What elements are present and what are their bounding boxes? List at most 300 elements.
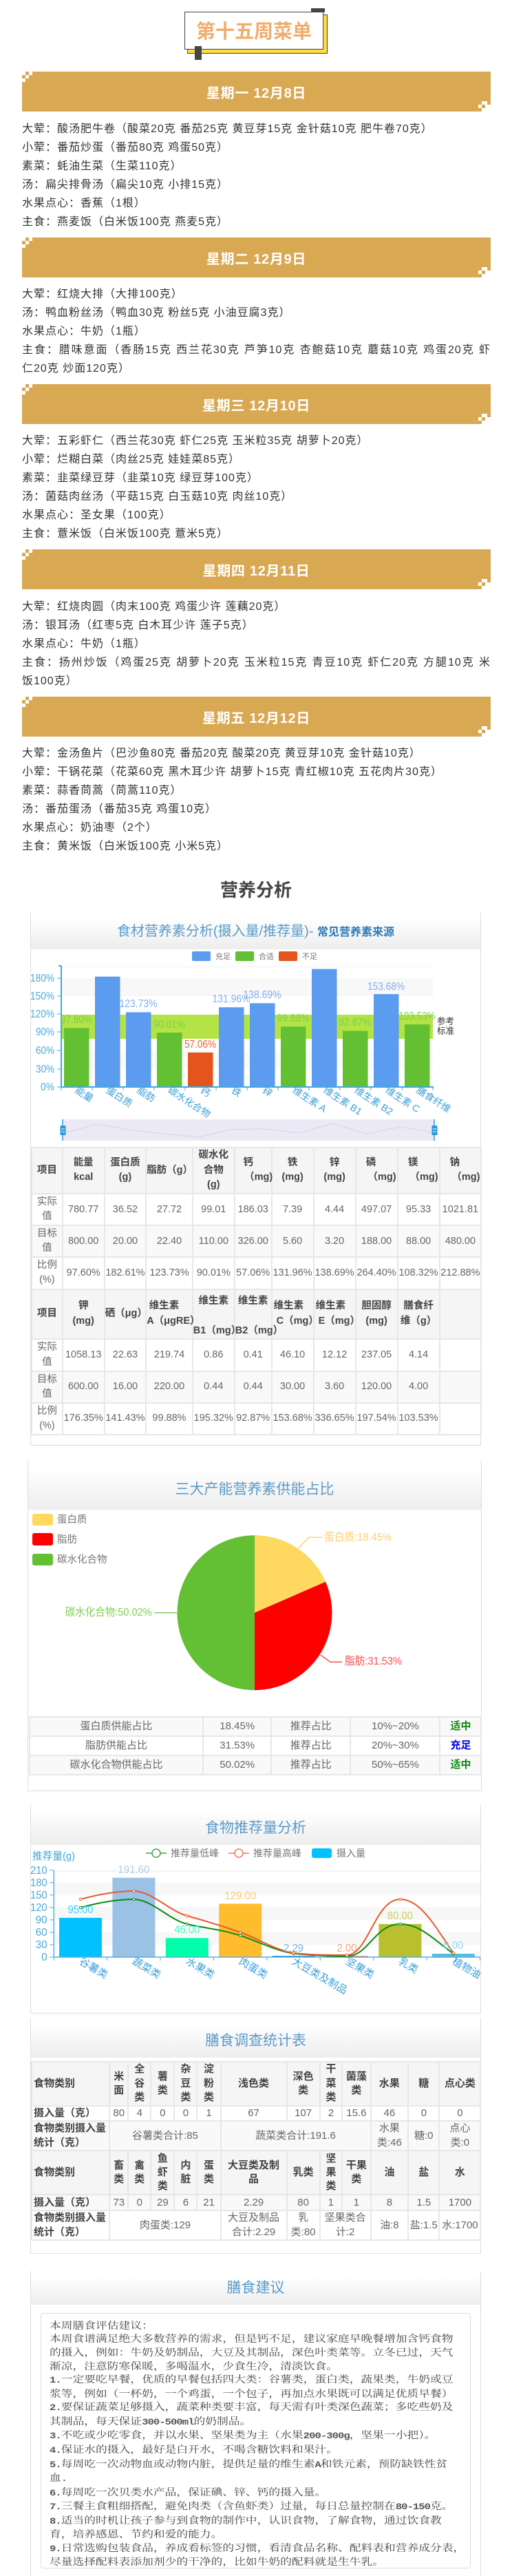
table: nutrient values: (%)	[39, 1274, 55, 1285]
table: nutrient values: 4.44	[325, 1204, 344, 1215]
table: nutrient values: 36.52	[113, 1204, 138, 1215]
advice text: 血.	[50, 2471, 67, 2484]
table: dietary survey: 21	[203, 2197, 215, 2208]
table: nutrient values: 22.63	[113, 1349, 138, 1360]
table: nutrient values: 480.00	[445, 1236, 476, 1247]
recommendation high curve	[79, 1890, 455, 1956]
table: dietary survey: 深色	[293, 2071, 314, 2082]
menu lines: 星期三: 素菜：韭菜绿豆芽（韭菜10克 绿豆芽100克）	[22, 472, 259, 483]
advice text: 6.每周吃一次贝类水产品，保证碘、锌、钙的摄入量。	[50, 2485, 326, 2499]
advice text: 5.每周吃一次动物血或动物内脏，提供足量的维生素A和铁元素，预防缺铁性贫	[50, 2457, 447, 2471]
category labels: 坚果类	[343, 1956, 376, 1981]
category labels	[73, 1084, 453, 1120]
pie legend: 脂肪	[57, 1534, 77, 1545]
menu lines: 星期五: 水果点心：奶油枣（2个）	[22, 822, 158, 833]
y axis labels: 90	[36, 1914, 47, 1926]
table: dietary survey: 糖	[418, 2078, 429, 2089]
pie legend: 碳水化合物	[57, 1554, 107, 1565]
menu lines: 星期三	[22, 434, 369, 540]
panel heading: 食材营养素分析: 食材营养素分析(摄入量/推荐量)- 常见营养素来源	[117, 924, 394, 939]
bar value labels: 97.60%	[61, 1014, 92, 1026]
table: dietary survey: 类:46	[377, 2137, 402, 2149]
menu lines: 星期四: 水果点心：牛奶（1瓶） 饭100克）	[22, 637, 146, 687]
panel heading: 膳食建议	[31, 2271, 480, 2305]
y axis labels: 0	[41, 1952, 47, 1963]
advice box	[41, 2313, 471, 2568]
table: dietary survey: 鱼	[158, 2153, 168, 2164]
table: nutrient values: 120.00	[361, 1381, 392, 1392]
table: dietary survey: 虾	[158, 2166, 168, 2178]
table: nutrient values: 195.32%	[194, 1413, 233, 1424]
bar value labels	[67, 1864, 463, 1954]
advice text: 渐凉，注意防寒保暖，多喝温水，少食生冷，清淡饮食。	[50, 2359, 338, 2373]
panel heading: 三大产能营养素供能占比: 三大产能营养素供能占比	[175, 1481, 334, 1497]
table: nutrient values: 97.60%	[67, 1267, 100, 1278]
menu lines: 星期二: 主食：腊味意面（香肠15克 西兰花30克 芦笋10克 杏鲍菇10克 蘑菇10克 鸡蛋20克 虾	[22, 344, 491, 355]
table: dietary survey: 水果	[379, 2078, 400, 2089]
bar value labels: 80.00	[387, 1910, 413, 1922]
table: nutrient values: （mg)	[244, 1172, 273, 1183]
table: nutrient values: 800.00	[68, 1236, 98, 1247]
table: nutrient values: 3.60	[325, 1381, 344, 1392]
table: dietary survey: 水	[455, 2166, 465, 2178]
table: nutrient values: 锌	[330, 1157, 339, 1168]
y axis labels: 120%	[30, 1009, 54, 1020]
banner: 星期四 12月11日: 星期四 12月11日	[203, 564, 310, 579]
table: nutrient values: 336.65%	[314, 1413, 354, 1424]
table: nutrient values: 4.00	[409, 1381, 428, 1392]
table: dietary survey: 73	[113, 2197, 125, 2208]
table: nutrient values: 12.12	[322, 1349, 347, 1360]
menu lines: 星期五: 小荤：干锅花菜（花菜60克 黑木耳少许 胡萝卜15克 青红椒10克 五花肉片30克）	[22, 766, 442, 778]
table: dietary survey: 面	[114, 2084, 124, 2096]
table: nutrient values: 4.14	[409, 1349, 428, 1360]
day menu: 星期五	[22, 697, 491, 852]
table: nutrient values	[31, 1147, 482, 1435]
table: nutrient values: 维生素	[199, 1296, 228, 1307]
banner: 星期三 12月10日: 星期三 12月10日	[202, 399, 310, 414]
table: nutrient values: 钙	[243, 1157, 253, 1168]
banner: 星期五 12月12日	[22, 697, 491, 737]
table: nutrient values: 铁	[288, 1157, 297, 1168]
pie chart: macronutrient share	[32, 1514, 402, 1691]
panel: macronutrient energy share	[28, 1461, 482, 1791]
table: nutrient values: 合物	[204, 1165, 224, 1176]
table: dietary survey: 类	[351, 2084, 361, 2096]
table: dietary survey: 80	[297, 2197, 309, 2208]
combo chart: food intake and recommendation	[31, 1848, 480, 1996]
bar chart: nutrient intake ratio	[30, 951, 454, 1141]
y axis labels: 90%	[36, 1026, 54, 1038]
intake bars	[59, 1878, 475, 1957]
table: energy share: 碳水化合物供能占比	[70, 1759, 163, 1771]
table: dietary survey: 统计（克）	[34, 2226, 85, 2238]
table: nutrient values: （mg)	[368, 1172, 396, 1183]
table: dietary survey: 类	[204, 2173, 214, 2185]
advice text: 浆等，例如（一杯奶，一个鸡蛋，一个包子，再加点水果既可以满足优质早餐）	[50, 2387, 454, 2400]
table: nutrient values: 600.00	[68, 1381, 98, 1392]
table: dietary survey: 品	[248, 2173, 259, 2185]
category labels: 膳食纤维	[414, 1084, 453, 1115]
data zoom slider	[61, 1119, 438, 1141]
bar value labels: 131.96%	[212, 993, 250, 1005]
y axis labels: 60	[36, 1927, 47, 1939]
menu lines: 星期三: 汤：菌菇肉丝汤（平菇15克 白玉菇10克 肉丝10克）	[22, 490, 292, 503]
panel: food recommendation analysis	[30, 1805, 481, 2014]
table: dietary survey: 类	[158, 2180, 168, 2192]
table: dietary survey: 8	[387, 2197, 392, 2208]
menu lines: 星期一	[22, 123, 433, 227]
table: nutrient values: 16.00	[113, 1381, 138, 1392]
table: nutrient values: 维生素	[274, 1300, 303, 1311]
table: dietary survey: 油:8	[380, 2219, 399, 2231]
day menu: 星期三	[22, 384, 491, 540]
bar value labels: 95.00	[67, 1904, 94, 1916]
menu lines: 星期五: 汤：番茄蛋汤（番茄35克 鸡蛋10克）	[22, 803, 217, 815]
table: nutrient values: 264.40%	[356, 1267, 396, 1278]
title badge: 第十五周菜单	[184, 8, 328, 60]
table: dietary survey: 6	[183, 2197, 189, 2208]
table: dietary survey: 点心类	[445, 2078, 476, 2089]
advice text: 其制品，每天保证300-500ml的奶制品。	[50, 2414, 251, 2428]
table: dietary survey: 类	[298, 2084, 308, 2096]
table: energy share: 蛋白质供能占比	[81, 1720, 153, 1732]
menu lines: 星期四: 汤：银耳汤（红枣5克 白木耳少许 莲子5克）	[22, 620, 254, 631]
table: energy share: 推荐占比	[290, 1740, 332, 1751]
table: nutrient values: 30.00	[280, 1381, 305, 1392]
title badge: 第十五周菜单: 第十五周菜单	[196, 21, 312, 42]
table: energy share: 推荐占比	[290, 1759, 332, 1771]
bar value labels: 129.00	[224, 1890, 256, 1902]
chart legend: 不足	[302, 953, 317, 961]
table: dietary survey: 蔬菜类合计:191.6	[255, 2130, 336, 2142]
category labels: 大豆类及制品	[290, 1956, 349, 1996]
chart legend	[146, 1848, 365, 1859]
table: dietary survey: 类	[114, 2173, 124, 2185]
table: nutrient values: 7.39	[283, 1204, 302, 1215]
table: nutrient values: (mg)	[72, 1316, 94, 1327]
advice text: 8.适当的时机让孩子参与到食物的制作中，认识食物，了解食物，通过饮食教	[50, 2513, 442, 2527]
menu lines: 星期二: 汤：鸭血粉丝汤（鸭血30克 粉丝5克 小油豆腐3克）	[22, 307, 290, 318]
table: energy share: 20%~30%	[372, 1740, 419, 1751]
category labels: 肉蛋类	[237, 1956, 269, 1981]
advice text: 4.保证水的摄入，最好是白开水，不喝含糖饮料和果汁。	[50, 2442, 338, 2456]
category labels: 维生素 B2	[352, 1084, 395, 1117]
recommendation low curve	[79, 1898, 455, 1958]
table: nutrient values: 131.96%	[273, 1267, 312, 1278]
table: nutrient values: 0.41	[244, 1349, 263, 1360]
table: nutrient values: 维生素	[238, 1296, 268, 1307]
table: dietary survey: 46	[384, 2107, 395, 2119]
table: dietary survey: 果	[326, 2166, 336, 2178]
advice text: 9.日常选购包装食品，养成看标签的习惯，看清食品名称、配料表和营养成分表，	[50, 2541, 465, 2555]
pie callouts: 蛋白质:18.45%	[324, 1531, 392, 1543]
category labels: 蔬菜类	[130, 1956, 162, 1981]
table: dietary survey: 食物类别摄入量	[34, 2212, 106, 2224]
banner: 星期一 12月8日: 星期一 12月8日	[206, 86, 306, 101]
table: dietary survey: 计:2	[336, 2226, 354, 2238]
table: nutrient values: kcal	[74, 1172, 93, 1183]
table: energy share: 充足	[450, 1740, 471, 1751]
bar value labels: 90.01%	[153, 1019, 185, 1031]
chart legend	[192, 951, 317, 961]
advice text: 的摄入，例如：牛奶及奶制品，大豆及其制品，深色叶类菜等。立冬已过，天气	[50, 2345, 454, 2359]
table: nutrient values: 钾	[78, 1300, 88, 1311]
table: nutrient values: (mg)	[281, 1172, 303, 1183]
table: dietary survey: 脏	[180, 2173, 191, 2185]
bar value labels: 57.06%	[184, 1039, 216, 1051]
table: dietary survey: 大豆类及制	[228, 2160, 279, 2171]
table: dietary survey: 1.5	[416, 2197, 431, 2208]
table: dietary survey: 蛋	[204, 2160, 214, 2171]
table: energy share: 适中	[450, 1720, 471, 1732]
menu lines: 星期一: 主食：燕麦饭（白米饭100克 燕麦5克）	[22, 216, 228, 227]
bar value labels: 191.60	[118, 1864, 149, 1876]
pie legend	[32, 1514, 107, 1565]
table: nutrient values: 维生素	[316, 1300, 345, 1311]
table: nutrient values: 维生素	[149, 1300, 179, 1311]
table: dietary survey: 坚果类合	[325, 2212, 366, 2224]
table: dietary survey: 摄入量（克）	[34, 2197, 96, 2208]
pie slices	[178, 1535, 332, 1690]
panel: dietary advice	[30, 2271, 481, 2576]
menu lines: 星期一: 水果点心：香蕉（1根）	[22, 197, 146, 209]
table: nutrient values: 磷	[366, 1157, 376, 1168]
table: nutrient values: 88.00	[406, 1236, 431, 1247]
table: nutrient values: 值	[42, 1357, 52, 1368]
day menu: 星期四	[22, 549, 491, 687]
table: dietary survey: 水果	[379, 2122, 400, 2134]
table: nutrient values: 0.44	[204, 1381, 223, 1392]
table: dietary survey: 盐:1.5	[410, 2219, 438, 2231]
bars	[64, 969, 429, 1087]
table: nutrient values: 实际	[37, 1196, 57, 1207]
table: nutrient values: 123.73%	[149, 1267, 189, 1278]
table: dietary survey: 摄入量（克）	[34, 2107, 96, 2119]
panel: dietary survey table	[30, 2018, 481, 2254]
table: nutrient values: A（μgRE）	[147, 1316, 200, 1327]
banner: 星期五 12月12日: 星期五 12月12日	[202, 711, 310, 726]
y axis labels	[30, 1865, 47, 1963]
table: dietary survey: 类	[204, 2091, 214, 2103]
table: dietary survey: 水:1700	[442, 2219, 478, 2231]
table: energy share: 31.53%	[220, 1740, 255, 1751]
table: dietary survey: 2	[328, 2107, 334, 2119]
table: dietary survey: 谷	[134, 2078, 145, 2089]
table: nutrient values: 蛋白质	[110, 1157, 140, 1168]
table: dietary survey: 0	[457, 2107, 463, 2119]
table: dietary survey: 菜	[326, 2078, 336, 2089]
day menu: 星期二	[22, 237, 491, 374]
panel heading: 食材营养素分析	[31, 913, 480, 949]
menu lines: 星期四: 大荤：红烧肉圆（肉末100克 鸡蛋少许 莲藕20克）	[22, 600, 286, 613]
category labels: 碳水化合物	[166, 1084, 213, 1120]
category labels: 蛋白质	[104, 1084, 134, 1109]
pie callouts: 脂肪:31.53%	[345, 1655, 402, 1667]
table: dietary survey: 菌藻	[346, 2071, 367, 2082]
table: nutrient values: 目标	[37, 1374, 57, 1385]
table: dietary survey: 0	[421, 2107, 427, 2119]
table: nutrient values: 1058.13	[65, 1349, 101, 1360]
table: nutrient values: 0.86	[204, 1349, 223, 1360]
category labels: 能量	[73, 1084, 96, 1104]
table: nutrient values: 141.43%	[105, 1413, 145, 1424]
menu lines: 星期五: 大荤：金汤鱼片（巴沙鱼80克 番茄20克 酸菜20克 黄豆芽10克 金针菇10克）	[22, 748, 421, 759]
table: nutrient values: 103.53%	[398, 1413, 438, 1424]
y axis title: 推荐量(g)	[32, 1850, 75, 1862]
table: nutrient values: 脂肪（g）	[147, 1165, 193, 1176]
reference band: 标准	[437, 1026, 454, 1036]
table: dietary survey: 干	[326, 2063, 336, 2075]
table: dietary survey: 4	[137, 2107, 142, 2119]
table: nutrient values: 95.33	[406, 1204, 431, 1215]
bar value labels: 138.69%	[244, 989, 281, 1001]
table: nutrient values: （mg)	[410, 1172, 438, 1183]
table: dietary survey: 肉蛋类:129	[140, 2219, 191, 2231]
table: nutrient values: (mg)	[323, 1172, 345, 1183]
table: dietary survey: 油	[384, 2166, 394, 2178]
table: dietary survey: 食物类别	[34, 2166, 75, 2178]
advice text: 2.要保证蔬菜足够摄入，蔬菜种类要丰富，每天需有叶类深色蔬菜；多吃些奶及	[50, 2400, 454, 2414]
table: dietary survey: 0	[183, 2107, 189, 2119]
pie callouts: 碳水化合物:50.02%	[65, 1606, 152, 1618]
table: dietary survey: 大豆及制品	[228, 2212, 279, 2224]
table: nutrient values: 目标	[37, 1228, 57, 1239]
table: dietary survey: 0	[137, 2197, 142, 2208]
table: nutrient values: 237.05	[361, 1349, 392, 1360]
table: dietary survey: 1	[206, 2107, 212, 2119]
menu lines: 星期四	[22, 600, 491, 687]
category labels: 锌	[260, 1084, 275, 1099]
table: energy share: 10%~20%	[372, 1720, 419, 1732]
category labels: 钙	[198, 1084, 213, 1099]
table: nutrient values: 1021.81	[442, 1204, 478, 1215]
table: nutrient values: B2（mg）	[235, 1325, 283, 1336]
table: dietary survey: 类	[180, 2091, 191, 2103]
table: dietary survey: 107	[295, 2107, 312, 2119]
heading: 营养分析: 营养分析	[220, 880, 292, 900]
chart legend: 充足	[215, 951, 231, 961]
chart legend: 推荐量高峰	[253, 1848, 301, 1859]
y axis labels: 30	[36, 1939, 47, 1951]
pie legend: 蛋白质	[57, 1514, 87, 1525]
table: nutrient values: 182.61%	[105, 1267, 145, 1278]
table: nutrient values: 值	[42, 1243, 52, 1254]
category labels: 乳类	[396, 1956, 420, 1976]
bar value labels: 153.68%	[367, 981, 405, 993]
panel heading: 三大产能营养素供能占比	[28, 1461, 481, 1510]
table: dietary survey: 畜	[114, 2160, 124, 2171]
table: dietary survey: 薯	[158, 2071, 168, 2082]
table: nutrient values: 镁	[408, 1157, 418, 1168]
reference band	[61, 1015, 454, 1039]
table: nutrient values: 99.01	[201, 1204, 226, 1215]
table: nutrient values: 219.74	[154, 1349, 184, 1360]
table: nutrient values: 钠	[450, 1157, 460, 1168]
table: nutrient values: 197.54%	[356, 1413, 396, 1424]
table: dietary survey: 点心	[449, 2122, 470, 2134]
table: nutrient values: 22.40	[157, 1236, 182, 1247]
table: nutrient values: 能量	[74, 1157, 94, 1168]
bar value labels	[61, 981, 435, 1051]
menu lines: 星期二	[22, 288, 491, 374]
axes	[50, 1870, 480, 1961]
advice text: 育，培养感恩、节约和爱的能力。	[50, 2527, 222, 2541]
y axis labels: 150%	[30, 991, 54, 1002]
category labels: 谷薯类	[77, 1956, 109, 1981]
menu lines: 星期五	[22, 747, 442, 852]
table: nutrient values: 20.00	[113, 1236, 138, 1247]
table: dietary survey: 类:0	[451, 2137, 469, 2149]
table: dietary survey: 类	[351, 2173, 361, 2185]
menu lines: 星期一: 大荤：酸汤肥牛卷（酸菜20克 番茄25克 黄豆芽15克 金针菇10克 肥牛卷70克）	[22, 123, 433, 135]
table: nutrient values: 维（g）	[401, 1316, 436, 1327]
table: dietary survey: 淀	[204, 2063, 214, 2075]
chart legend: 合适	[259, 951, 274, 961]
table: nutrient values: 220.00	[154, 1381, 184, 1392]
table: dietary survey: 乳	[298, 2212, 308, 2224]
menu lines: 星期三: 小荤：烂糊白菜（肉丝25克 娃娃菜85克）	[22, 453, 240, 465]
table: nutrient values: 胆固醇	[361, 1300, 392, 1311]
advice text: 本周食谱满足绝大多数营养的需求，但是钙不足，建议家庭早晚餐增加含钙食物	[50, 2332, 454, 2345]
table: dietary survey: 1	[328, 2197, 334, 2208]
table: dietary survey: 食物类别摄入量	[34, 2122, 106, 2134]
menu lines: 星期五: 素菜：蒜香茼蒿（茼蒿110克）	[22, 785, 182, 796]
advice text: 3.不吃或少吃零食，并以水果、坚果类为主（水果200-300g，坚果一小把）。	[50, 2428, 436, 2442]
table: nutrient values: 99.88%	[152, 1413, 186, 1424]
table: dietary survey: 杂	[180, 2063, 191, 2075]
table: nutrient values: 值	[42, 1389, 52, 1400]
table: nutrient values: 176.35%	[64, 1413, 103, 1424]
table: nutrient values: 27.72	[157, 1204, 182, 1215]
panel heading: 食物推荐量分析	[31, 1805, 480, 1845]
panel: nutrient analysis	[30, 913, 481, 1446]
table: nutrient values: (g)	[207, 1179, 220, 1190]
bar value labels: 103.53%	[399, 1011, 435, 1022]
menu lines: 星期一: 素菜：蚝油生菜（生菜110克）	[22, 160, 182, 172]
pie callouts	[65, 1531, 402, 1667]
advice text: 本周膳食评估建议：	[50, 2319, 153, 2332]
table: energy share: 50.02%	[220, 1759, 255, 1771]
table: nutrient values: E（mg）	[319, 1316, 360, 1327]
advice text: 1.一定要吃早餐，优质的早餐包括四大类：谷薯类，蛋白类，蔬果类，牛奶或豆	[50, 2372, 454, 2386]
day menu: 星期一	[22, 72, 491, 227]
table: energy share: 脂肪供能占比	[85, 1740, 147, 1751]
table: dietary survey: 全	[134, 2063, 145, 2075]
table: dietary survey: 15.6	[346, 2107, 366, 2119]
table: dietary survey: 类:80	[291, 2226, 316, 2238]
table: nutrient values: 项目	[37, 1308, 57, 1319]
panel heading: 膳食建议: 膳食建议	[227, 2280, 285, 2296]
table: nutrient values: 212.88%	[440, 1267, 480, 1278]
banner: 星期三 12月10日	[22, 384, 491, 424]
menu lines: 星期一: 小荤：番茄炒蛋（番茄80克 鸡蛋50克）	[22, 142, 228, 153]
bar value labels: 92.87%	[339, 1017, 372, 1028]
table: dietary survey: 合计:2.29	[232, 2226, 275, 2238]
advice text	[50, 2319, 465, 2568]
table: nutrient values: (g)	[119, 1172, 131, 1183]
table: dietary survey: 乳类	[293, 2166, 314, 2178]
reference band: 参考	[437, 1016, 454, 1026]
bar value labels: 8.00	[443, 1940, 463, 1952]
table: dietary survey: 类	[326, 2180, 336, 2192]
table: energy share: 适中	[450, 1759, 471, 1771]
category labels	[77, 1956, 482, 1996]
table: dietary survey: 米	[114, 2071, 124, 2082]
table: nutrient values: 碳水化	[199, 1150, 228, 1161]
table: nutrient values: 46.10	[280, 1349, 305, 1360]
table: energy share	[29, 1716, 482, 1775]
